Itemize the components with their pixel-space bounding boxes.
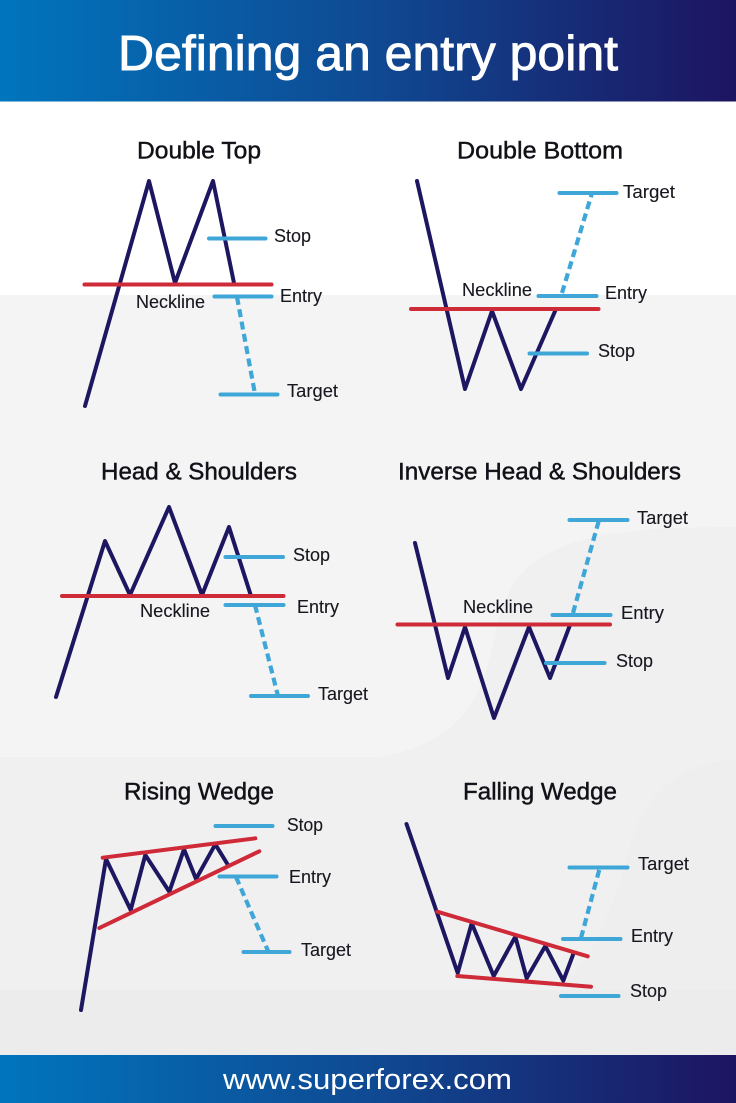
stop level bbox=[561, 994, 618, 998]
label: neckline: Neckline bbox=[140, 601, 210, 621]
target level bbox=[220, 392, 278, 396]
heading: double top: Double Top bbox=[137, 138, 261, 164]
label: target: Target bbox=[623, 182, 675, 202]
price line bbox=[415, 543, 570, 718]
footer banner bbox=[0, 1055, 736, 1103]
title: Defining an entry point bbox=[118, 27, 618, 81]
heading: rising wedge: Rising Wedge bbox=[124, 778, 274, 806]
neckline bbox=[411, 307, 598, 311]
price line bbox=[406, 824, 573, 981]
heading: double bottom: Double Bottom bbox=[457, 138, 623, 164]
entry level bbox=[563, 937, 620, 941]
lower trendline bbox=[457, 976, 591, 987]
website url: www.superforex.com bbox=[222, 1064, 512, 1096]
label: target: Target bbox=[287, 381, 338, 401]
entry level bbox=[220, 874, 276, 878]
label: entry: Entry bbox=[605, 283, 647, 303]
upper trendline bbox=[103, 838, 255, 858]
label: target: Target bbox=[318, 684, 368, 704]
label: entry: Entry bbox=[631, 926, 673, 946]
label: stop: Stop bbox=[293, 545, 330, 565]
label: stop: Stop bbox=[274, 226, 311, 246]
neckline bbox=[398, 622, 610, 626]
panel: double top bbox=[84, 138, 338, 406]
panel: inverse head and shoulders bbox=[398, 458, 688, 718]
label: entry: Entry bbox=[621, 603, 664, 623]
entry level bbox=[538, 294, 596, 298]
label: stop: Stop bbox=[287, 815, 323, 835]
lower trendline bbox=[99, 851, 259, 928]
stop level bbox=[226, 555, 283, 559]
heading: falling wedge: Falling Wedge bbox=[463, 778, 617, 806]
dashed projection bbox=[236, 877, 268, 952]
heading: inverse head and shoulders: Inverse Head & Shoulders bbox=[398, 458, 681, 486]
panel: head and shoulders bbox=[56, 458, 368, 704]
label: entry: Entry bbox=[280, 286, 322, 306]
heading: head and shoulders: Head & Shoulders bbox=[101, 458, 297, 486]
upper trendline bbox=[437, 912, 588, 956]
panel: rising wedge bbox=[81, 778, 351, 1010]
stop level bbox=[530, 352, 587, 356]
dashed projection bbox=[255, 605, 278, 696]
label: neckline: Neckline bbox=[462, 280, 532, 300]
label: stop: Stop bbox=[616, 651, 653, 671]
neckline bbox=[62, 594, 284, 598]
price line bbox=[85, 181, 234, 406]
label: neckline: Neckline bbox=[463, 597, 533, 617]
label: stop: Stop bbox=[630, 981, 667, 1001]
stop level bbox=[216, 824, 272, 828]
price line bbox=[417, 181, 556, 389]
dashed projection bbox=[581, 867, 600, 938]
label: target: Target bbox=[301, 940, 351, 960]
target level bbox=[244, 950, 290, 954]
label: target: Target bbox=[638, 854, 689, 874]
target level bbox=[560, 191, 616, 195]
label: target: Target bbox=[637, 508, 688, 528]
label: entry: Entry bbox=[289, 867, 331, 887]
target level bbox=[570, 518, 628, 522]
target level bbox=[570, 866, 628, 870]
entry level bbox=[552, 613, 610, 617]
panel: double bottom bbox=[411, 138, 675, 389]
neckline bbox=[84, 282, 272, 286]
price line bbox=[56, 507, 251, 697]
label: entry: Entry bbox=[297, 597, 339, 617]
header banner bbox=[0, 0, 736, 102]
label: neckline: Neckline bbox=[136, 292, 205, 312]
dashed projection bbox=[237, 297, 255, 394]
entry level bbox=[214, 294, 272, 298]
price line bbox=[81, 844, 228, 1010]
entry level bbox=[226, 603, 284, 607]
label: stop: Stop bbox=[598, 341, 635, 361]
stop level bbox=[209, 236, 266, 240]
dashed projection bbox=[573, 520, 599, 613]
dashed projection bbox=[562, 193, 592, 293]
stop level bbox=[546, 661, 604, 665]
panel: falling wedge bbox=[406, 778, 689, 1001]
target level bbox=[251, 694, 308, 698]
